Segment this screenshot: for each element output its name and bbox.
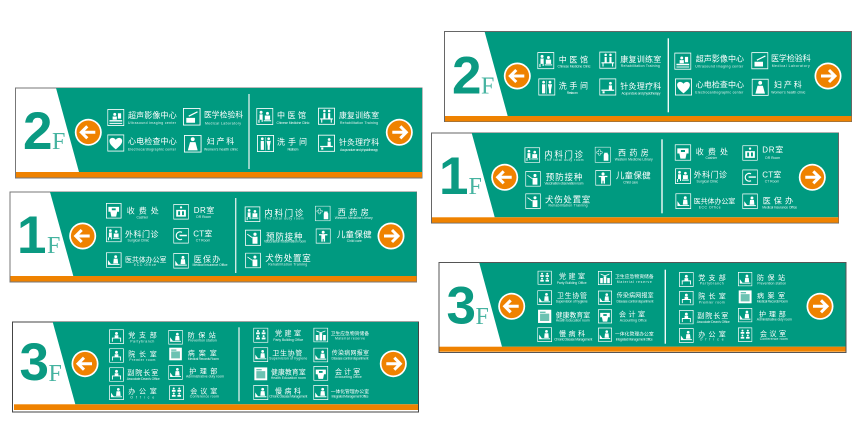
item: 妇产科: 妇产科 xyxy=(774,80,802,90)
item: 超声影像中心 xyxy=(675,53,744,69)
item: 儿童保健: 儿童保健 xyxy=(616,171,651,181)
item: 卫生应急物资储备: 卫生应急物资储备 xyxy=(615,273,654,280)
item: 预防接种 xyxy=(245,230,306,245)
arrow: right xyxy=(378,222,404,250)
item: 儿童保健: 儿童保健 xyxy=(337,230,372,240)
item: 会议室: 会议室 xyxy=(190,387,217,396)
item: 西药房: Western Medicine Library xyxy=(335,216,373,220)
item: 护理部: Administrative duty room xyxy=(186,374,224,378)
item: 犬伤处置室 xyxy=(526,194,591,209)
item: 慢病科: Chronic Disease Management xyxy=(554,337,592,341)
item: 儿童保健 xyxy=(316,229,372,243)
panel: 3F sign right xyxy=(439,262,846,352)
item: 康复训练室 xyxy=(318,108,379,125)
item: 外科门诊: 外科门诊 xyxy=(125,229,158,239)
item: 犬伤处置室: 犬伤处置室 xyxy=(265,253,311,263)
panel: 2F sign right xyxy=(444,32,852,122)
item: CT室: CT Room xyxy=(765,180,779,184)
item: 慢病科: 慢病科 xyxy=(559,329,585,338)
item: 健康教育室: Health Education room xyxy=(556,319,590,323)
item: 外科门诊: Surgical Clinic xyxy=(128,239,149,243)
item: 卫生应急物资储备 xyxy=(598,271,654,285)
item: 院长室: 院长室 xyxy=(128,349,157,358)
item: 护理部 xyxy=(169,366,224,379)
item: 犬伤处置室: Rehabilitation Training xyxy=(548,204,588,208)
item: 副院长室 xyxy=(110,368,160,381)
item: 病案室 xyxy=(739,290,788,303)
item: 针灸理疗科 xyxy=(600,79,661,95)
item: 卫生协管: 卫生协管 xyxy=(557,291,587,300)
item: 卫生应急物资储备 xyxy=(314,328,369,342)
divider xyxy=(238,327,240,401)
item: 心电检查中心: Electrocardiographic center xyxy=(128,148,177,152)
item: 党支部 xyxy=(679,273,726,286)
item: DR室: DR Room xyxy=(196,215,211,219)
floor number 1F: F xyxy=(468,174,482,200)
item: 内科门诊: 内科门诊 xyxy=(264,208,304,218)
item: 医保办 xyxy=(174,253,228,268)
item: 会计室 xyxy=(314,366,362,380)
item: 妇产科: 妇产科 xyxy=(207,136,234,146)
item: 中医馆: Chinese Medicine Clinic xyxy=(276,121,310,125)
item: DR室: DR Room xyxy=(765,156,780,160)
item: 会议室: Conference room xyxy=(190,395,219,399)
item: 内科门诊: 内科门诊 xyxy=(544,149,583,159)
item: 慢病科 xyxy=(254,385,307,400)
item: 党建室: 党建室 xyxy=(275,329,301,338)
item: 病案室 xyxy=(169,348,219,361)
item: 健康教育室: 健康教育室 xyxy=(271,368,306,377)
item: 一体化管理办公室 xyxy=(314,385,369,400)
item: 医学检验科: Medical Laboratory xyxy=(772,64,810,68)
item: 院长室: Premier room xyxy=(129,358,155,362)
item: 预防接种 xyxy=(526,171,584,186)
item: CT室: CT Room xyxy=(196,239,210,243)
item: 预防接种: Vaccination observation room xyxy=(264,240,306,244)
item: 心电检查中心 xyxy=(675,79,744,95)
item: 一体化管理办公室: 一体化管理办公室 xyxy=(615,330,654,337)
item: 儿童保健: Child care xyxy=(347,239,362,243)
item: DR室 xyxy=(174,204,214,219)
item: 针灸理疗科: 针灸理疗科 xyxy=(620,81,661,91)
item: 会计室: Accounting Office xyxy=(620,318,647,322)
floor number 3F: F xyxy=(48,361,62,387)
item: 内科门诊: The total duty room xyxy=(264,217,304,221)
item: 中医馆: 中医馆 xyxy=(559,54,588,64)
arrow: left xyxy=(72,350,98,377)
item: 康复训练室: Rehabilitation Training xyxy=(621,64,660,68)
item: 超声影像中心: 超声影像中心 xyxy=(128,110,177,120)
item: 一体化管理办公室 xyxy=(598,328,654,341)
item: 超声影像中心: 超声影像中心 xyxy=(696,54,744,64)
item: 党支部: Partybranch xyxy=(130,339,154,343)
item: 党建室: Party Building Office xyxy=(273,338,303,342)
panel: 1F sign left xyxy=(10,192,416,282)
item: 超声影像中心: Ultrasound imaging center xyxy=(128,121,177,125)
item: 犬伤处置室 xyxy=(246,253,311,268)
item: DR室 xyxy=(743,145,783,160)
item: 慢病科: Chronic Disease Management xyxy=(269,395,307,399)
item: 康复训练室: 康复训练室 xyxy=(620,54,661,64)
divider xyxy=(661,139,663,213)
item: DR室: DR室 xyxy=(762,145,783,155)
floor number 2F: 2 xyxy=(23,102,52,161)
floor number 3F: 3 xyxy=(446,276,476,336)
item: 健康教育室: Health Education room xyxy=(271,376,306,380)
item: 党支部: Partybranch xyxy=(700,282,724,286)
item: 洗手间: Restroom xyxy=(288,148,299,152)
item: 康复训练室 xyxy=(600,52,661,68)
item: CT室: CT室 xyxy=(762,169,781,179)
floor number 1F xyxy=(17,206,60,265)
item: 预防接种: 预防接种 xyxy=(546,172,582,182)
floor number 2F: F xyxy=(52,129,65,155)
floor number 1F: F xyxy=(47,233,60,259)
item: 医共体办公室: 医共体办公室 xyxy=(694,196,735,205)
item: 西药房 xyxy=(595,147,653,162)
item: 会议室: 会议室 xyxy=(760,329,786,338)
item: 超声影像中心 xyxy=(108,109,177,126)
item: 西药房 xyxy=(315,206,373,221)
item: 外科门诊 xyxy=(106,227,158,243)
arrow: left xyxy=(75,119,102,146)
item: 内科门诊: The total duty room xyxy=(544,158,584,162)
item: 党建室: Party Building Office xyxy=(557,281,587,285)
item: 慢病科: 慢病科 xyxy=(275,387,301,396)
item: 预防接种: 预防接种 xyxy=(266,231,302,241)
arrow: left xyxy=(491,164,518,191)
item: 病案室: 病案室 xyxy=(188,349,217,358)
item: 一体化管理办公室: 一体化管理办公室 xyxy=(331,388,369,395)
floor number 2F xyxy=(452,46,494,105)
item: 洗手间: 洗手间 xyxy=(559,80,588,90)
item: 防保站 xyxy=(738,272,786,286)
item: 西药房: 西药房 xyxy=(618,148,649,158)
item: 防保站: Prevention station xyxy=(757,281,786,285)
item: 收费处: 收费处 xyxy=(127,205,159,215)
item: CT室 xyxy=(743,169,781,185)
arrow: left xyxy=(504,62,531,90)
item: 副院长室 xyxy=(680,310,730,324)
item: 医保办: 医保办 xyxy=(194,254,220,264)
item: 儿童保健 xyxy=(596,170,651,185)
item: 办公室: Office xyxy=(700,338,724,342)
floor number 2F: 2 xyxy=(452,46,481,105)
item: 会议室 xyxy=(170,386,219,400)
item: 党支部: 党支部 xyxy=(698,273,726,282)
item: 会计室: 会计室 xyxy=(619,310,645,319)
item: 卫生应急物资储备: Material reserve xyxy=(617,280,652,284)
panel: 1F sign right xyxy=(432,133,838,223)
item: 护理部: 护理部 xyxy=(189,367,217,376)
item: 慢病科 xyxy=(538,328,592,342)
item: 医学检验科: 医学检验科 xyxy=(204,110,243,120)
panel: 3F sign left xyxy=(12,322,418,412)
divider xyxy=(668,38,669,112)
item: 外科门诊 xyxy=(675,169,727,184)
item: 副院长室: 副院长室 xyxy=(127,368,158,377)
item: 心电检查中心: Electrocardiographic center xyxy=(695,91,744,95)
item: 医共体办公室: 医共体办公室 xyxy=(125,255,166,264)
item: 副院长室: 副院长室 xyxy=(697,311,728,320)
divider xyxy=(665,270,666,344)
item: 针灸理疗科: Acupuncture and physiotherapy xyxy=(340,148,378,152)
item: 传染病网报室: 传染病网报室 xyxy=(332,349,369,357)
item: 医保办: 医保办 xyxy=(763,195,793,205)
item: 院长室: Premier room xyxy=(699,300,725,304)
item: 会计室: Accounting Office xyxy=(335,375,362,379)
item: 健康教育室: 健康教育室 xyxy=(556,310,590,319)
item: 康复训练室: 康复训练室 xyxy=(339,110,379,120)
item: 心电检查中心 xyxy=(108,135,177,152)
item: 防保站 xyxy=(169,330,217,344)
arrow: right xyxy=(806,293,834,320)
arrow: left xyxy=(498,293,525,320)
item: 办公室: Office xyxy=(130,395,154,399)
item: 妇产科: Women's health clinic xyxy=(204,148,238,152)
item: 一体化管理办公室: Integrated Management Office xyxy=(616,337,653,341)
item: 内科门诊 xyxy=(525,148,584,162)
item: 传染病网报室: Disease control department xyxy=(332,356,369,360)
item: 一体化管理办公室: Integrated Management Office xyxy=(332,394,369,398)
item: 防保站: 防保站 xyxy=(757,273,785,282)
item: 针灸理疗科: 针灸理疗科 xyxy=(339,137,379,147)
item: 卫生应急物资储备: Material reserve xyxy=(335,337,365,341)
item: 康复训练室: Rehabilitation Training xyxy=(340,121,378,125)
item: 党支部: 党支部 xyxy=(128,331,157,340)
item: DR室: DR室 xyxy=(194,205,214,215)
floor number 3F xyxy=(446,276,489,336)
item: 医共体办公室: ECC Office xyxy=(699,205,721,209)
item: 健康教育室 xyxy=(254,367,306,380)
item: 病案室: Medical Records Room xyxy=(188,357,219,361)
item: 中医馆: 中医馆 xyxy=(277,110,306,120)
item: 办公室 xyxy=(110,386,157,400)
item: 会议室: Conference room xyxy=(760,337,788,341)
floor number 3F: 3 xyxy=(20,333,49,392)
item: 医共体办公室 xyxy=(106,253,166,267)
item: 院长室: 院长室 xyxy=(698,292,726,301)
item: 中医馆 xyxy=(257,108,310,125)
divider xyxy=(235,198,236,273)
floor number 2F xyxy=(23,102,65,161)
item: 心电检查中心: 心电检查中心 xyxy=(128,136,177,146)
item: 医共体办公室: ECC Office xyxy=(134,263,156,267)
floor number 1F xyxy=(439,147,482,206)
item: 医学检验科 xyxy=(183,108,243,126)
item: 卫生协管 xyxy=(254,348,307,362)
item: 办公室: 办公室 xyxy=(128,387,157,396)
item: 办公室: 办公室 xyxy=(698,330,726,339)
item: 防保站: 防保站 xyxy=(188,331,216,340)
item: 健康教育室 xyxy=(538,310,590,323)
item: 卫生协管: Supervision of hygiene xyxy=(269,357,307,361)
item: 党建室 xyxy=(538,271,587,285)
item: 卫生协管 xyxy=(538,291,588,305)
item: 传染病网报室: 传染病网报室 xyxy=(617,291,654,299)
item: 针灸理疗科 xyxy=(318,135,379,152)
item: 党建室: 党建室 xyxy=(559,272,585,281)
item: 外科门诊: 外科门诊 xyxy=(694,170,727,180)
item: 医保办: Medical Insurance Office xyxy=(192,263,228,267)
item: 卫生协管: Supervision of hygiene xyxy=(556,300,588,304)
item: 防保站: Prevention station xyxy=(188,339,217,343)
item: 医学检验科: 医学检验科 xyxy=(771,53,811,63)
floor number 1F: 1 xyxy=(439,147,468,206)
item: 医保办: Medical Insurance Office xyxy=(762,205,797,209)
item: 犬伤处置室: Rehabilitation Training xyxy=(268,262,307,266)
item: 卫生应急物资储备: 卫生应急物资储备 xyxy=(331,330,369,337)
item: 传染病网报室: Disease control department xyxy=(616,299,654,303)
item: 医保办 xyxy=(743,194,797,209)
item: 护理部: 护理部 xyxy=(759,309,786,318)
item: 心电检查中心: 心电检查中心 xyxy=(696,80,744,90)
item: 收费处: Cashier xyxy=(136,215,149,219)
item: 儿童保健: Child care xyxy=(623,181,638,185)
item: 会计室: 会计室 xyxy=(335,367,360,376)
floor number 1F: 1 xyxy=(17,206,46,265)
item: 超声影像中心: Ultrasound imaging center xyxy=(695,65,744,69)
item: 病案室: Medical Records Room xyxy=(757,299,788,303)
item: 收费处 xyxy=(675,145,728,160)
item: 洗手间: 洗手间 xyxy=(277,136,307,146)
item: CT室: CT室 xyxy=(193,229,212,239)
item: 洗手间: Restroom xyxy=(567,91,578,95)
item: 外科门诊: Surgical Clinic xyxy=(697,180,718,184)
item: 病案室: 病案室 xyxy=(757,291,785,300)
item: 西药房: 西药房 xyxy=(338,207,369,217)
item: 医学检验科 xyxy=(752,53,811,69)
item: 犬伤处置室: 犬伤处置室 xyxy=(545,195,591,205)
item: CT室 xyxy=(174,228,212,243)
floor number 3F: F xyxy=(476,304,489,330)
item: 传染病网报室 xyxy=(314,348,369,362)
item: 中医馆 xyxy=(538,53,591,69)
floor number 3F xyxy=(20,333,62,392)
item: 院长室 xyxy=(110,349,157,362)
arrow: right xyxy=(814,62,842,90)
item: 党建室 xyxy=(254,328,303,342)
item: 妇产科 xyxy=(184,135,238,152)
item: 内科门诊 xyxy=(245,207,304,222)
item: 预防接种: Vaccination observation room xyxy=(544,181,584,185)
item: 护理部 xyxy=(738,308,792,322)
item: 会计室 xyxy=(598,310,647,323)
item: 护理部: Administrative duty room xyxy=(757,317,792,321)
item: 洗手间 xyxy=(539,79,588,95)
arrow: right xyxy=(380,350,407,377)
item: 洗手间 xyxy=(257,135,307,152)
panel: 2F sign left xyxy=(16,88,422,178)
item: 中医馆: Chinese Medicine Clinic xyxy=(558,65,591,69)
item: 副院长室: Associate Dean's Office xyxy=(127,377,160,381)
item: 妇产科: Women's health clinic xyxy=(771,90,806,94)
arrow: right xyxy=(799,164,826,191)
item: 传染病网报室 xyxy=(598,291,654,304)
item: 针灸理疗科: Acupuncture and physiotherapy xyxy=(622,91,661,95)
item: 妇产科 xyxy=(752,79,806,95)
item: 副院长室: Associate Dean's Office xyxy=(697,320,730,324)
item: 医学检验科: Medical Laboratory xyxy=(205,122,241,126)
arrow: right xyxy=(386,119,413,146)
item: 党支部 xyxy=(110,330,157,344)
divider xyxy=(248,94,250,169)
item: 收费处: Cashier xyxy=(705,156,718,160)
item: 收费处: 收费处 xyxy=(696,146,728,156)
item: 办公室 xyxy=(679,329,726,342)
floor number 2F: F xyxy=(481,73,494,99)
item: 卫生协管: 卫生协管 xyxy=(272,349,302,358)
item: 医共体办公室 xyxy=(676,194,735,209)
item: 会议室 xyxy=(738,328,788,341)
arrow: left xyxy=(69,222,96,250)
item: 西药房: Western Medicine Library xyxy=(615,157,653,161)
item: 院长室 xyxy=(680,291,726,305)
item: 收费处 xyxy=(106,203,159,219)
